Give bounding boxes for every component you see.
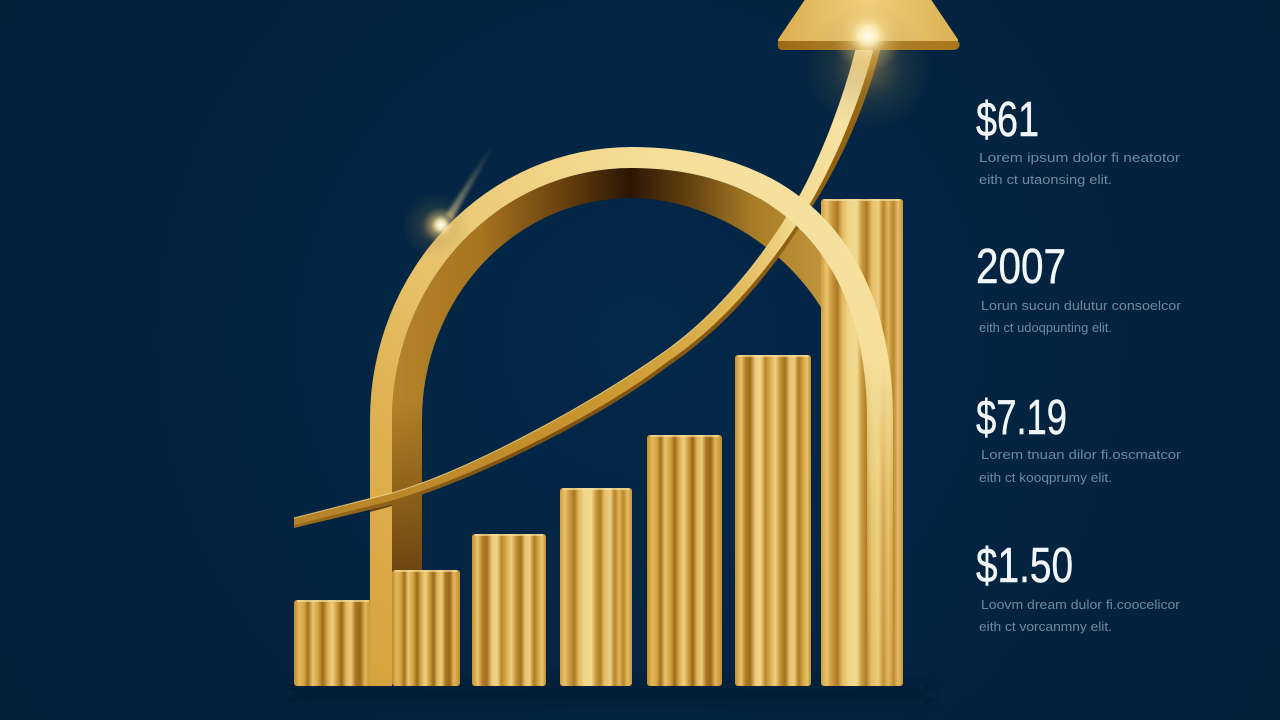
growth arrow shaft (294, 43, 882, 528)
stat 4 value: $1.50 (976, 539, 1073, 593)
shaft side (294, 43, 882, 528)
glow: arch spark (402, 146, 494, 260)
bar 6 (735, 355, 811, 686)
stat 2 description: Lorun sucun dulutur consoelcor (981, 299, 1181, 313)
stat 4 description (979, 598, 1180, 634)
stat 2 description: eith ct udoqpunting elit. (979, 321, 1112, 335)
stat 1 description (979, 151, 1180, 187)
arch band over arrow at crossing (770, 178, 840, 270)
stat 4 description: Loovm dream dulor fi.coocelicor (981, 598, 1180, 612)
arrow shadow on arch (370, 499, 392, 512)
stat 2 description (979, 299, 1181, 335)
floor shadow (290, 688, 930, 700)
stat 3 description: eith ct kooqprumy elit. (979, 471, 1112, 485)
stat 1 (976, 93, 1180, 187)
stat 3 value: $7.19 (976, 391, 1067, 445)
shaft highlight edge (294, 200, 797, 518)
bar 5 (647, 435, 722, 686)
stat 2 (976, 240, 1181, 335)
stat 2 value: 2007 (976, 240, 1066, 294)
stat 3 description (979, 448, 1181, 485)
bar 1 (294, 600, 372, 686)
bar chart (294, 355, 811, 686)
stat 4 description: eith ct vorcanmny elit. (979, 620, 1112, 634)
arch light band (370, 147, 893, 686)
stat 1 value: $61 (976, 93, 1039, 147)
arrowhead base (778, 41, 960, 50)
bar 4 (560, 488, 632, 686)
stat 3 (976, 391, 1181, 485)
stat 3 description: Lorem tnuan dilor fi.oscmatcor (981, 448, 1181, 462)
bar 3 (472, 534, 546, 686)
arrowhead (778, 0, 960, 50)
shaft top face (294, 43, 875, 525)
stat 4 (976, 539, 1180, 634)
stat 1 description: Lorem ipsum dolor fi neatotor (979, 151, 1180, 165)
arrowhead face (778, 0, 958, 42)
bar 2 (392, 570, 460, 686)
bar 7 (821, 199, 903, 686)
stat 1 description: eith ct utaonsing elit. (979, 173, 1112, 187)
arch inner dark face (392, 168, 867, 572)
glow: arrow tip (804, 0, 932, 130)
